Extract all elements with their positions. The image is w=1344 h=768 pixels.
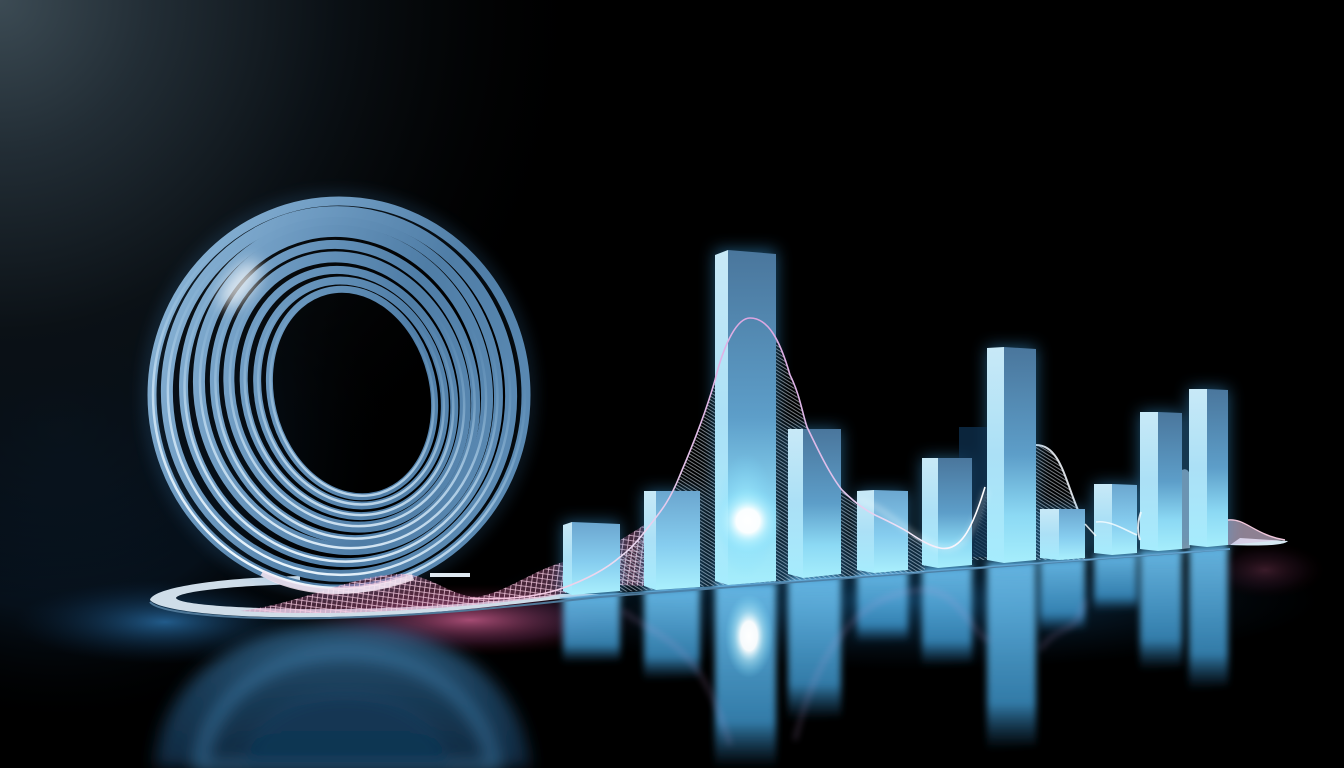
cyan halo on tallest bar	[716, 453, 776, 577]
bar 10	[1140, 412, 1182, 551]
bar 4	[788, 429, 841, 578]
coil end wire	[430, 573, 470, 577]
hump three	[1226, 520, 1282, 545]
bar 8	[1040, 509, 1085, 560]
bar 5	[857, 490, 908, 573]
coil bottom front band	[262, 573, 413, 591]
bar 3: tallest	[715, 250, 776, 585]
bar reflections on floor	[563, 545, 1228, 768]
front wave curve across bars	[470, 318, 1285, 599]
bar 9	[1094, 484, 1137, 555]
wire mesh wave	[240, 318, 1282, 613]
coil sheen at upper left	[213, 255, 267, 315]
hump one bright crest	[1036, 445, 1078, 510]
bar glows	[563, 250, 1228, 595]
ground shine line under bars	[560, 549, 1230, 598]
bar 1	[563, 522, 620, 595]
floor glows	[15, 530, 1325, 670]
reflected wave glow	[622, 590, 1085, 745]
spiral coil	[149, 195, 529, 593]
coil reflection on floor	[155, 625, 530, 768]
white mesh hump two	[1182, 469, 1190, 549]
white mesh under main peak	[620, 318, 925, 592]
bar 6	[922, 458, 972, 568]
bar 7	[987, 347, 1036, 563]
coil outer glow	[149, 198, 529, 592]
hotspot on tallest bar	[714, 487, 782, 555]
bar chart: eleven glowing bars	[563, 250, 1228, 595]
bar 2	[644, 491, 700, 590]
pink mesh section	[240, 525, 644, 613]
coil rings	[149, 195, 529, 593]
ground ring and track line	[150, 538, 1288, 618]
reflected light hotspot	[725, 594, 773, 678]
bar 11	[1189, 389, 1228, 547]
dim rear bar	[959, 427, 989, 557]
coil lower highlights	[150, 196, 528, 592]
white mesh hump one	[972, 445, 1085, 560]
